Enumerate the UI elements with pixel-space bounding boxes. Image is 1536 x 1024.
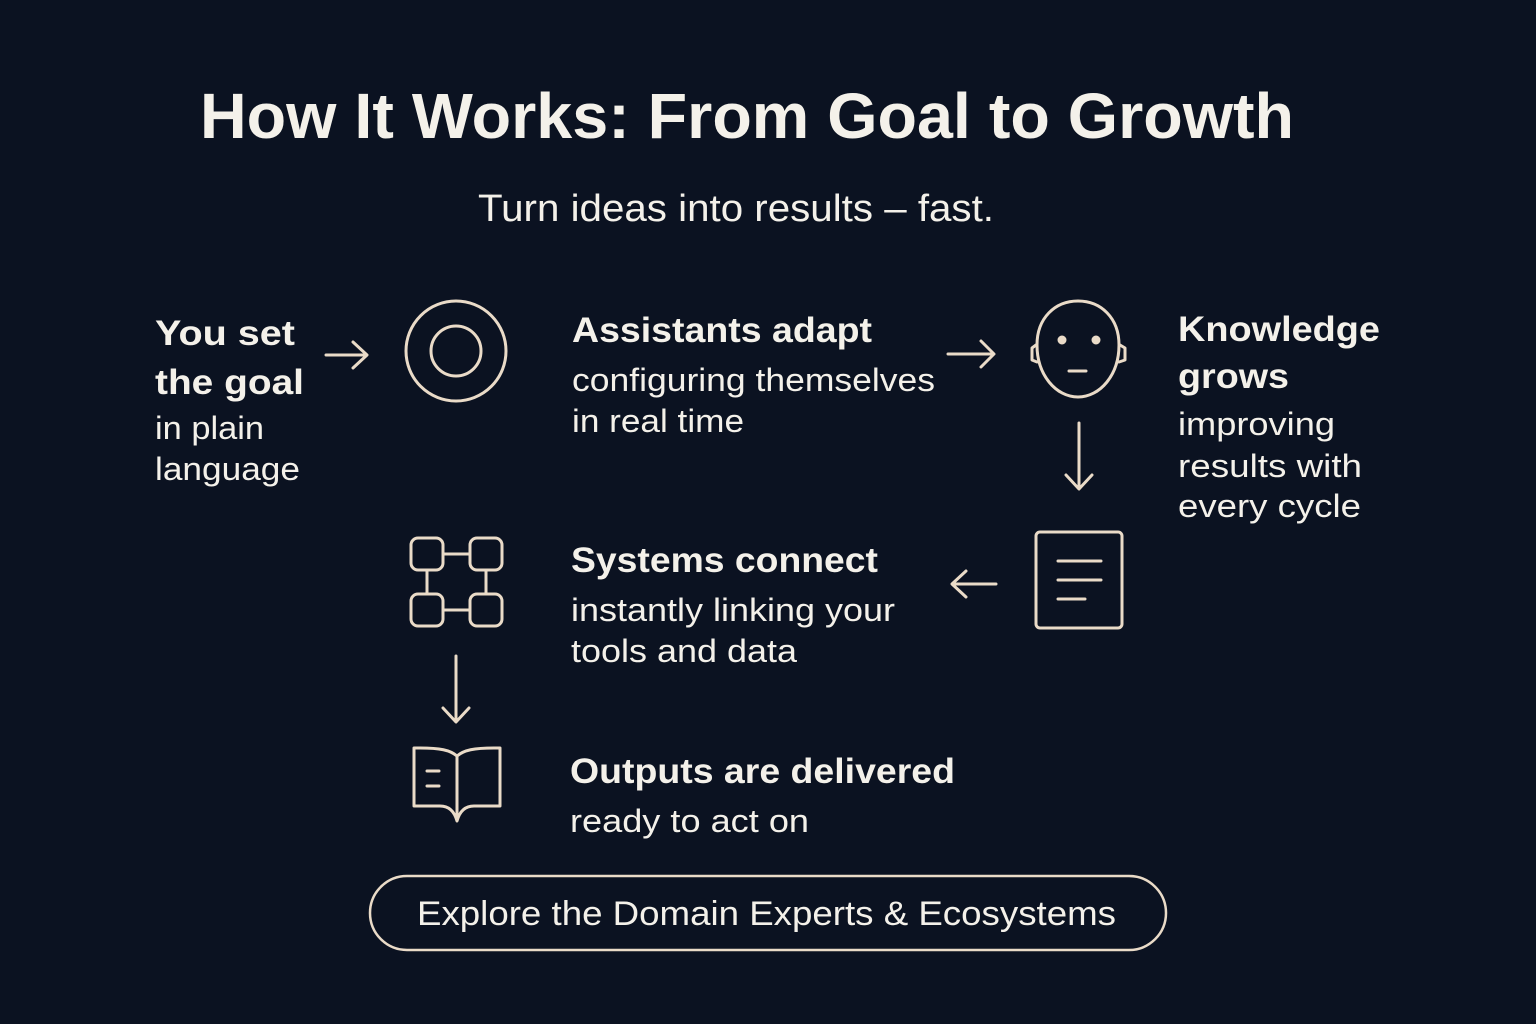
icon: open book (414, 748, 500, 821)
icon: connected nodes (411, 538, 502, 626)
step 5 text: outputs delivered: Outputs are delivered (570, 752, 955, 791)
step 2 text: assistants adapt: in real time (572, 403, 744, 439)
step 4 text: systems connect: instantly linking your (571, 592, 895, 628)
step 5 text: outputs delivered (570, 752, 955, 839)
step 1 text: you set the goal (155, 314, 304, 487)
icon: document (1036, 532, 1122, 628)
step 3 text: knowledge grows (1178, 310, 1380, 524)
arrow: systems down to book (443, 656, 469, 722)
step 3 text: knowledge grows: results with (1178, 448, 1362, 484)
step 2 text: assistants adapt (572, 311, 935, 439)
step 2 text: assistants adapt: Assistants adapt (572, 311, 872, 350)
step 1 text: you set the goal: language (155, 451, 300, 487)
title: How It Works: From Goal to Growth (200, 80, 1294, 152)
step 1 text: you set the goal: the goal (155, 363, 304, 402)
step 3 text: knowledge grows: improving (1178, 406, 1335, 442)
step 2 text: assistants adapt: configuring themselves (572, 362, 935, 398)
icon: face (1032, 301, 1125, 397)
arrow: to face (948, 341, 994, 367)
step 4 text: systems connect: tools and data (571, 633, 797, 669)
arrow: step 1 to target (326, 342, 367, 368)
step 1 text: you set the goal: in plain (155, 410, 264, 446)
arrow: face down to document (1066, 423, 1092, 489)
step 1 text: you set the goal: You set (155, 314, 295, 353)
icon: target (406, 301, 506, 401)
subtitle: Turn ideas into results – fast. (478, 188, 994, 230)
step 4 text: systems connect (571, 541, 895, 669)
arrow: document to systems (952, 571, 996, 597)
button: explore (370, 876, 1166, 950)
step 3 text: knowledge grows: Knowledge (1178, 310, 1380, 349)
step 3 text: knowledge grows: every cycle (1178, 488, 1361, 524)
step 3 text: knowledge grows: grows (1178, 357, 1289, 396)
step 5 text: outputs delivered: ready to act on (570, 803, 809, 839)
step 4 text: systems connect: Systems connect (571, 541, 878, 580)
button: explore: Explore the Domain Experts & Ecosystems (417, 895, 1116, 933)
